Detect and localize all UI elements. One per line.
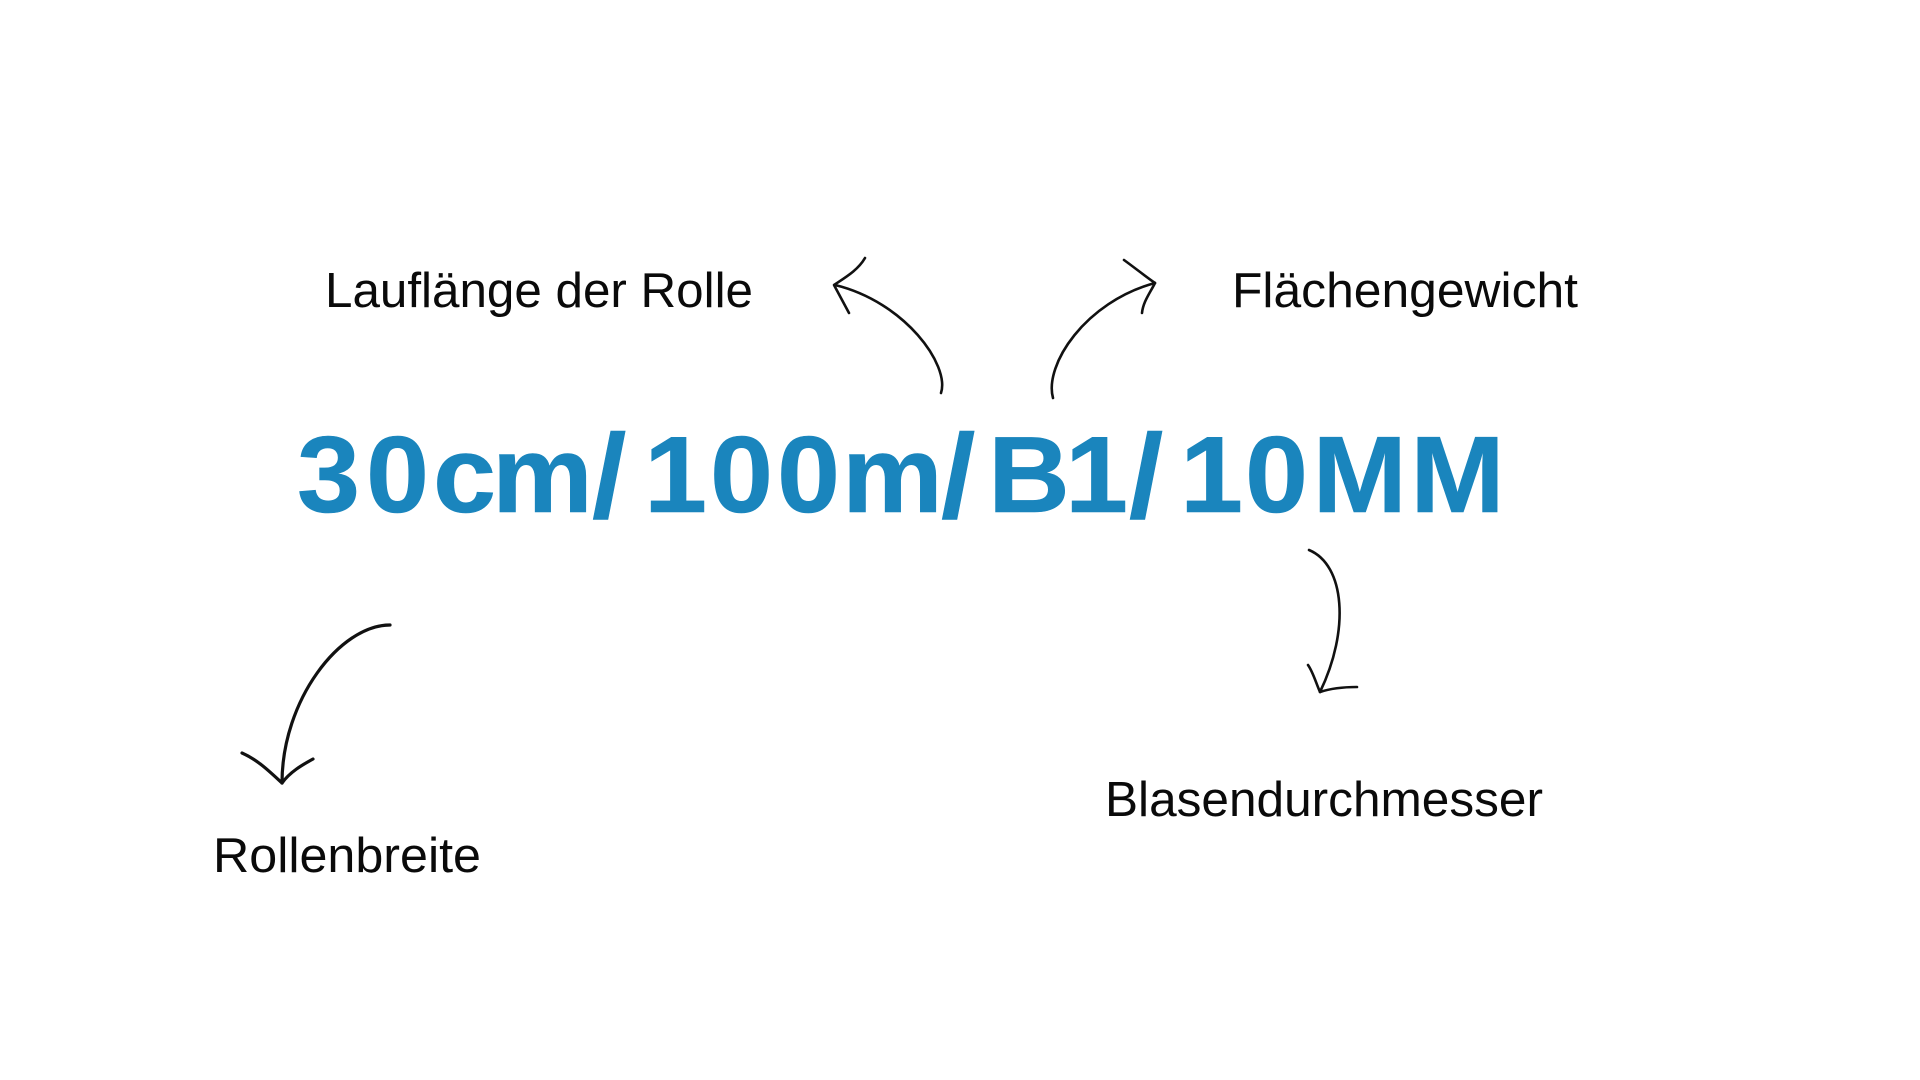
- label: Flächengewicht: Flächengewicht: [1232, 264, 1578, 318]
- main product code: B1: [988, 413, 1128, 536]
- main product code: /: [941, 409, 975, 542]
- main product code: /: [592, 409, 626, 542]
- label: Rollenbreite: Rollenbreite: [213, 829, 481, 883]
- main product code: /: [1129, 409, 1163, 542]
- label: Lauflänge der Rolle: Lauflänge der Rolle: [325, 264, 753, 318]
- arrow: to Rollenbreite: [242, 625, 390, 783]
- arrow: to Flächengewicht: [1052, 260, 1155, 398]
- arrow: to Blasendurchmesser: [1308, 550, 1357, 692]
- label: Blasendurchmesser: Blasendurchmesser: [1105, 773, 1543, 827]
- main product code: 10MM: [1180, 413, 1505, 536]
- arrow: to Lauflänge der Rolle: [834, 258, 942, 393]
- main product code: 30cm: [297, 413, 593, 536]
- main product code: 100m: [644, 413, 943, 536]
